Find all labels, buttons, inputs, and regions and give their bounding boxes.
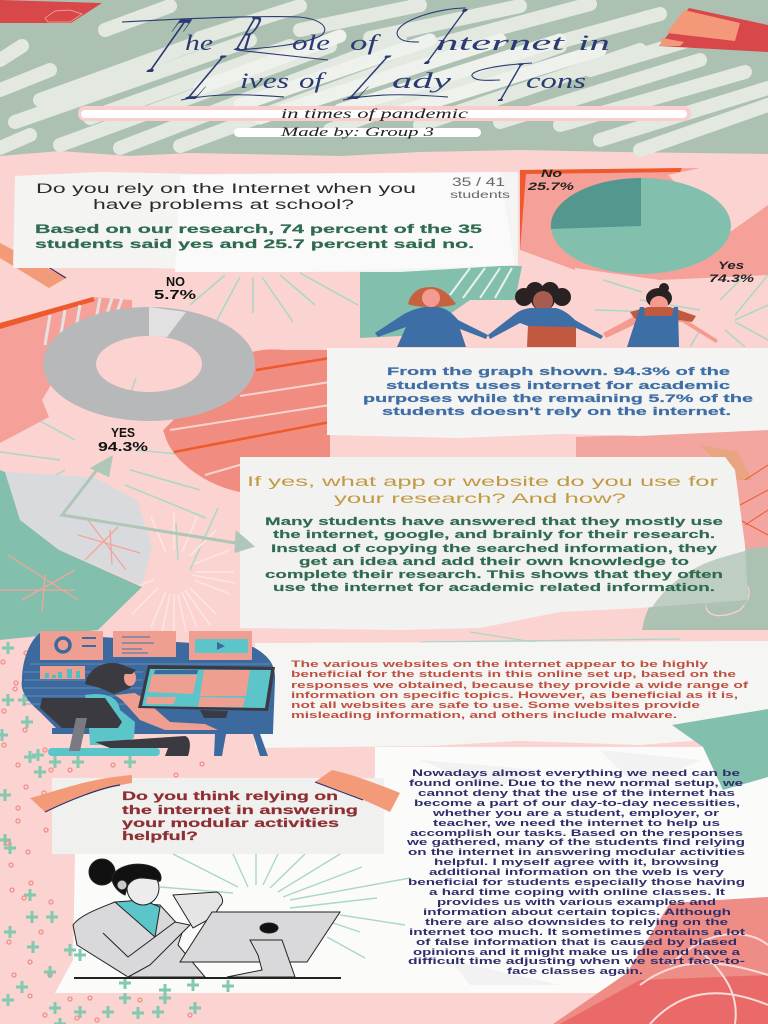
second panel: graph explanation: purposes while the remaining 5.7% of the — [363, 393, 753, 405]
red torn corner top left — [0, 0, 102, 23]
first panel: rely on internet: have problems at school? — [93, 197, 354, 212]
arrows from axis — [62, 458, 252, 551]
first panel: rely on internet: students said yes and 25.7 percent said no. — [35, 237, 474, 251]
main paragraph: additional information on the web is very — [429, 867, 724, 877]
salmon patch left with stripes — [0, 297, 132, 443]
fourth panel: website warning: misleading information, and others include malware. — [291, 710, 677, 720]
main paragraph: accomplish our tasks. Based on the responses — [410, 828, 743, 838]
question panel: modular activities: your modular activities — [122, 818, 339, 830]
chair — [40, 698, 122, 728]
third panel: apps and websites: Instead of copying the searched information, they — [271, 543, 719, 555]
first panel: rely on internet: students — [450, 190, 510, 201]
title: L — [332, 41, 411, 114]
orange tape left — [30, 775, 132, 812]
body — [73, 902, 205, 977]
fourth panel: website warning: beneficial for the students in this online set up, based on the — [291, 669, 736, 679]
title: L — [172, 40, 246, 114]
main paragraph: whether you are a student, employer, or — [431, 808, 720, 818]
credit bar — [234, 125, 481, 139]
question panel: modular activities: Do you think relying on — [122, 791, 338, 803]
main paragraph: internet too much. It sometimes contains a lot — [409, 927, 745, 937]
third panel: apps and websites: the internet, google, and brainly for their research. — [273, 529, 715, 541]
question panel: modular activities: the internet in answering — [122, 805, 358, 817]
donut chart: 94.3% — [98, 439, 149, 454]
confetti over lady panel — [44, 944, 234, 996]
second panel: graph explanation: students doesn't rely on the internet. — [382, 406, 731, 418]
title: cons — [526, 68, 586, 93]
title: I — [489, 51, 532, 114]
title — [122, 0, 610, 114]
third panel: apps and websites: complete their research. This shows that they often — [265, 569, 723, 581]
fourth panel: website warning: responses we obtained, because they provide a wide range of — [291, 680, 750, 690]
illustration: woman at computer — [22, 631, 275, 756]
title: ole — [292, 30, 330, 55]
title: in — [578, 30, 610, 55]
third panel: apps and websites: If yes, what app or website do you use for — [247, 473, 719, 489]
monitor — [138, 665, 275, 718]
donut chart: 5.7% — [154, 287, 197, 302]
header background with scribbles — [0, 0, 768, 165]
title: T — [130, 2, 205, 90]
main paragraph: information about certain topics. Although — [423, 907, 731, 917]
main paragraph: difficult time adjusting when we start face-to- — [408, 956, 745, 966]
fourth panel: website warning — [255, 641, 768, 748]
rays in lady panel — [160, 854, 410, 958]
title: of — [350, 30, 382, 55]
illustration: woman with paper and computer — [73, 859, 341, 978]
main paragraph: teacher, we need the internet to help us — [433, 818, 720, 828]
first panel: rely on internet — [13, 172, 518, 272]
fourth panel: website warning: The various websites on the internet appear to be highly — [291, 659, 709, 669]
woman 3 — [603, 283, 718, 347]
title: ives — [240, 68, 289, 93]
sunburst rays — [0, 273, 768, 570]
main paragraph: face classes again. — [507, 966, 643, 976]
pale pink burst — [118, 512, 235, 632]
question panel: modular activities — [52, 778, 384, 854]
pie chart: No — [541, 168, 562, 180]
main paragraph — [405, 768, 745, 976]
third panel: apps and websites: get an idea and add their own knowledge to — [299, 556, 689, 568]
three women holding hands — [375, 282, 718, 347]
mint triangle — [672, 709, 768, 790]
main paragraph: found online. Due to the new normal setup, we — [409, 778, 743, 788]
main paragraph: provides us with various examples and — [437, 897, 716, 907]
first panel: rely on internet: Do you rely on the Internet when you — [36, 181, 416, 196]
subtitle bar — [78, 106, 691, 122]
main paragraph: there are also downsides to relying on the — [425, 917, 728, 927]
main paragraph: of false information that is caused by biased — [416, 937, 737, 947]
orange tape right — [315, 770, 400, 812]
second panel: graph explanation: From the graph shown. 94.3% of the — [387, 366, 730, 378]
paper — [173, 892, 223, 928]
green and grey abstract shapes — [0, 470, 152, 640]
pie chart: Yes — [718, 260, 744, 272]
desk — [52, 720, 273, 756]
confetti pattern left strip — [0, 642, 204, 1024]
fourth panel: website warning: information on specific topics. However, as beneficial as it is, — [291, 690, 738, 700]
third panel: apps and websites: your research? And how? — [334, 490, 626, 506]
title: he — [185, 30, 213, 55]
person — [85, 663, 218, 756]
teal patch behind women — [360, 266, 522, 338]
credit bar: Made by: Group 3 — [279, 125, 434, 139]
lower white panel — [55, 747, 768, 993]
second panel: graph explanation: students uses internet for academic — [386, 380, 730, 392]
fourth panel: website warning: not all websites are safe to use. Some websites provide — [291, 700, 700, 710]
red and peach corner top right — [659, 8, 768, 52]
computer — [180, 912, 340, 962]
pie chart — [527, 168, 754, 285]
title: ady — [392, 68, 451, 93]
donut chart — [43, 274, 255, 454]
main paragraph: a hard time coping with online classes. It — [429, 887, 725, 897]
question panel: modular activities: helpful? — [122, 831, 198, 843]
first panel: rely on internet: Based on our research, 74 percent of the 35 — [35, 222, 483, 236]
main paragraph: become a part of our day-to-day necessities, — [414, 798, 740, 808]
main paragraph: opinions and it might make us idle and have a — [413, 947, 740, 957]
third panel: apps and websites: Many students have answered that they mostly use — [265, 516, 723, 528]
title: R — [226, 6, 273, 62]
first panel: rely on internet: 35 / 41 — [452, 177, 505, 189]
dashboard cards — [40, 631, 252, 679]
right side decorations — [576, 430, 768, 630]
salmon patch behind first chart — [520, 168, 768, 280]
main paragraph: helpful. I myself agree with it, browsing — [434, 857, 719, 867]
rays below third panel — [420, 632, 680, 643]
main paragraph: we gathered, many of the students find relying — [405, 837, 745, 847]
main paragraph: cannot deny that the use of the internet has — [418, 788, 735, 798]
subtitle bar: in times of pandemic — [281, 107, 469, 122]
donut chart: NO — [166, 274, 185, 289]
third panel: apps and websites — [240, 457, 748, 630]
pie chart: 74.3% — [709, 273, 754, 285]
woman 1 — [375, 287, 488, 347]
third panel: apps and websites: use the internet for academic related information. — [273, 582, 715, 594]
donut chart: YES — [111, 425, 135, 440]
main paragraph: beneficial for students especially those having — [408, 877, 745, 887]
main paragraph: on the internet in answering modular activities — [408, 847, 745, 857]
second panel: graph explanation — [327, 348, 768, 438]
coral patch bottom right — [553, 897, 768, 1024]
woman 2 — [488, 282, 603, 347]
salmon circle with stripes — [163, 349, 330, 492]
peach tape left — [0, 243, 66, 288]
title: nternet — [436, 30, 566, 55]
pie chart: 25.7% — [527, 181, 574, 193]
title: of — [299, 68, 327, 93]
head — [127, 871, 159, 905]
main paragraph: Nowadays almost everything we need can be — [412, 768, 740, 778]
